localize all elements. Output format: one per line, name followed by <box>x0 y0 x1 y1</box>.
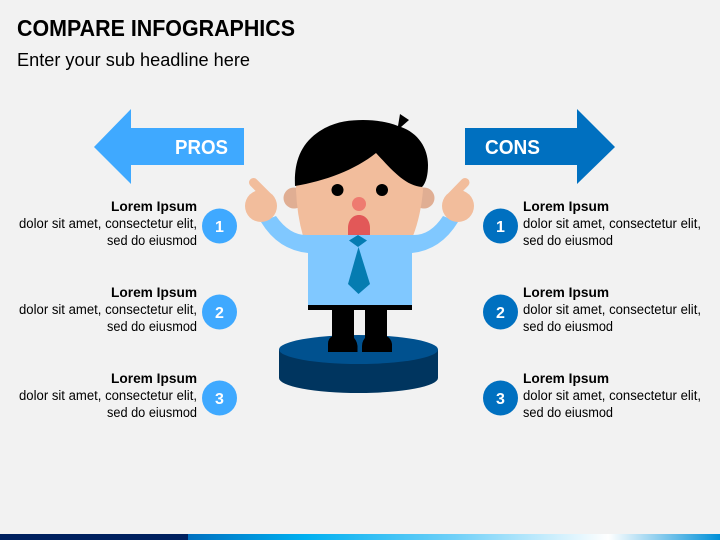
eyes <box>332 184 388 196</box>
cons item 3: Lorem Ipsum <box>523 370 609 386</box>
cons item 1: Lorem Ipsum <box>523 198 609 214</box>
arrow: pros: PROS <box>175 137 228 159</box>
hand: left <box>245 182 277 222</box>
cons item 2: dolor sit amet, consectetur elit, <box>523 302 701 317</box>
cons item 2: sed do eiusmod <box>523 319 613 334</box>
pros item 2: 2 <box>215 305 224 322</box>
face <box>296 148 423 236</box>
arrow: cons <box>465 109 615 184</box>
cons item 3: sed do eiusmod <box>523 405 613 420</box>
arrow: cons: CONS <box>485 137 540 159</box>
ears <box>284 188 434 208</box>
cons item 1 <box>483 198 701 248</box>
pros item 1: dolor sit amet, consectetur elit, <box>19 216 197 231</box>
cons item 1: dolor sit amet, consectetur elit, <box>523 216 701 231</box>
footer bar <box>0 534 720 540</box>
sub headline: Enter your sub headline here <box>17 50 250 70</box>
tie <box>348 235 370 294</box>
platform <box>279 335 438 393</box>
mouth <box>348 215 370 236</box>
cons item 1: sed do eiusmod <box>523 233 613 248</box>
pros item 3 <box>19 370 237 420</box>
cons item 2: 2 <box>496 305 505 322</box>
cons item 2 <box>483 284 701 334</box>
pros item 1: sed do eiusmod <box>107 233 197 248</box>
belt <box>308 305 412 310</box>
shirt <box>308 235 412 305</box>
cons item 3: dolor sit amet, consectetur elit, <box>523 388 701 403</box>
character <box>245 114 474 352</box>
cons item 3 <box>483 370 701 420</box>
legs and shoes <box>328 308 392 352</box>
pros item 3: Lorem Ipsum <box>111 370 197 386</box>
pros item 1: Lorem Ipsum <box>111 198 197 214</box>
arms <box>261 216 458 253</box>
arrow: pros <box>94 109 244 184</box>
pros item 1 <box>19 198 237 248</box>
pros item 3: dolor sit amet, consectetur elit, <box>19 388 197 403</box>
cons item 2: Lorem Ipsum <box>523 284 609 300</box>
cons item 3: 3 <box>496 391 505 408</box>
pros item 2: Lorem Ipsum <box>111 284 197 300</box>
hand: right <box>442 182 474 222</box>
pros item 2 <box>19 284 237 334</box>
title: COMPARE INFOGRAPHICS <box>17 15 295 41</box>
pros item 3: 3 <box>215 391 224 408</box>
nose <box>352 197 366 211</box>
pros item 2: dolor sit amet, consectetur elit, <box>19 302 197 317</box>
pros item 2: sed do eiusmod <box>107 319 197 334</box>
cons item 1: 1 <box>496 219 505 236</box>
pros item 1: 1 <box>215 219 224 236</box>
hair <box>295 114 428 187</box>
pros item 3: sed do eiusmod <box>107 405 197 420</box>
